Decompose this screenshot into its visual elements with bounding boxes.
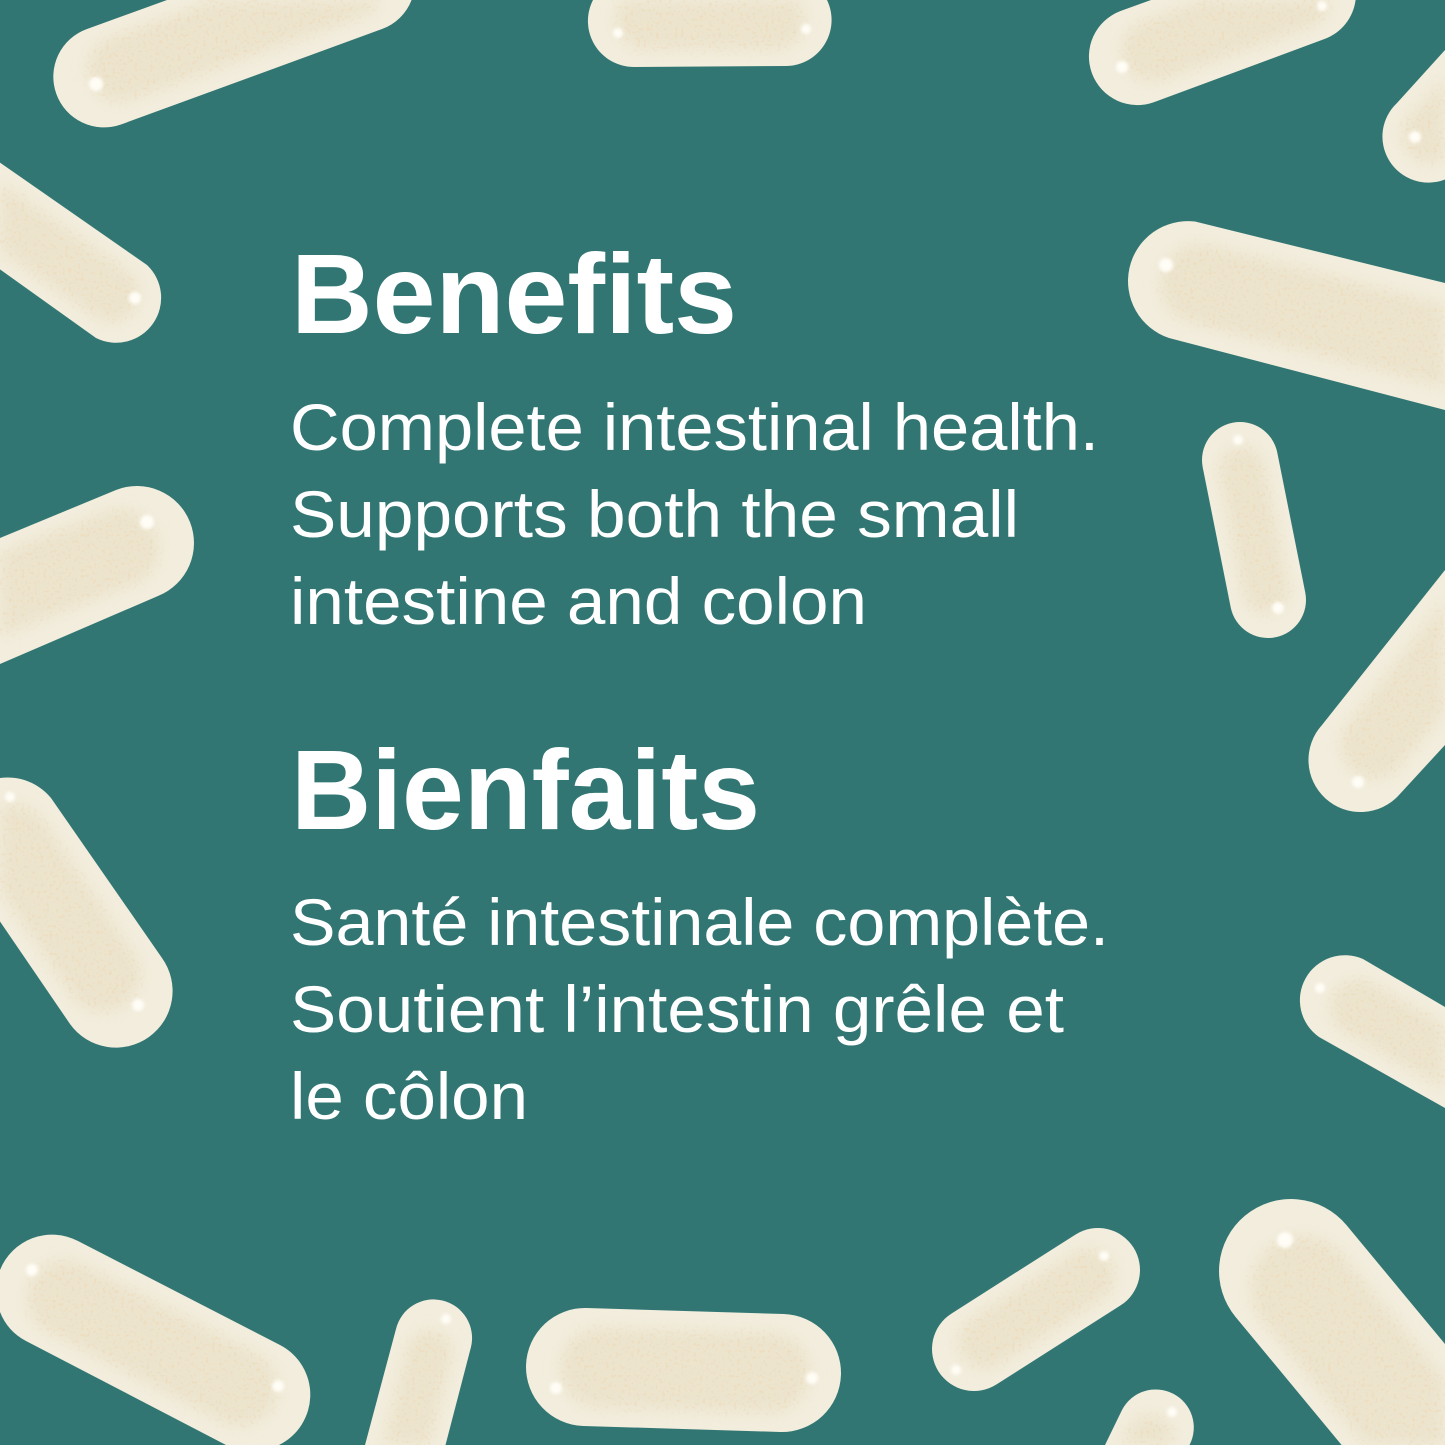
text block: English benefits: Complete intestinal health. xyxy=(290,390,1099,464)
capsule: far right top xyxy=(1382,50,1445,183)
capsule: left middle xyxy=(0,486,194,664)
text block: French benefits xyxy=(290,885,1109,1133)
capsule: right large xyxy=(1128,221,1445,410)
text block: English benefits: intestine and colon xyxy=(290,564,867,638)
capsule: bottom right small xyxy=(951,1251,1109,1375)
text block: French benefits: Soutient l’intestin grêle et xyxy=(290,972,1064,1046)
capsule: bottom tiny xyxy=(1105,1389,1194,1445)
capsule: right middle xyxy=(1308,570,1445,812)
capsule: left upper xyxy=(0,163,161,343)
capsule: bottom right large xyxy=(1219,1199,1445,1445)
capsule: bottom left xyxy=(0,1235,310,1445)
capsule: top centre xyxy=(588,0,832,67)
text block: French benefits: Santé intestinale complète. xyxy=(290,885,1109,959)
heading: Bienfaits: Bienfaits xyxy=(291,727,760,853)
text block: English benefits: Supports both the small xyxy=(290,477,1019,551)
capsule: right small xyxy=(1233,435,1284,614)
capsule: bottom small left xyxy=(365,1299,472,1445)
text block: French benefits: le côlon xyxy=(290,1059,528,1133)
capsule: left lower xyxy=(0,777,173,1048)
heading: Benefits: Benefits xyxy=(291,231,737,357)
capsule: top right xyxy=(1089,0,1356,105)
capsule: right lower xyxy=(1300,955,1445,1108)
capsule: top left xyxy=(53,0,412,127)
text block: English benefits xyxy=(290,390,1099,638)
capsule: bottom centre xyxy=(550,1367,818,1394)
